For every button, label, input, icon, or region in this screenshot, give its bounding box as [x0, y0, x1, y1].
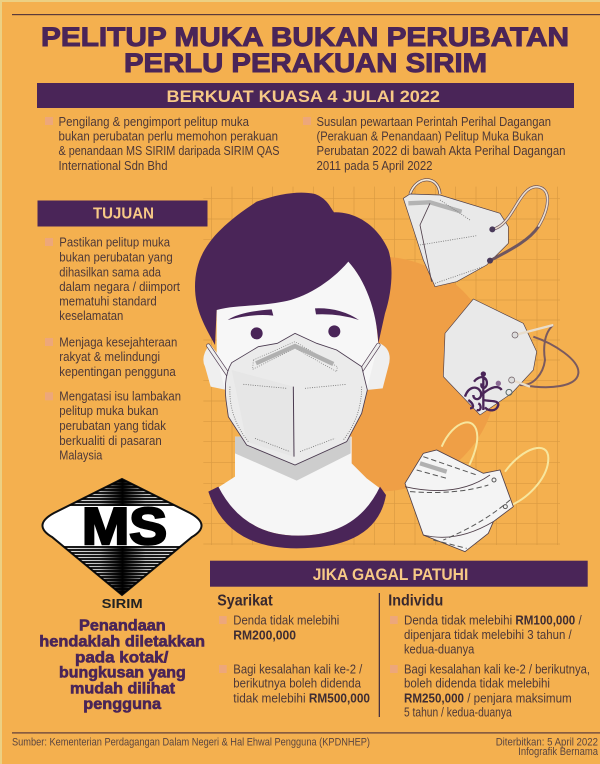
text block: purposes: perubatan yang tidak — [59, 418, 166, 433]
panel: individu penalties — [388, 593, 590, 720]
panel: individu penalties: Denda tidak melebihi RM100,000 / — [404, 612, 582, 627]
text block: purposes: Pastikan pelitup muka — [59, 235, 171, 250]
mask 2: floral mask — [443, 299, 578, 415]
banner: effective date: BERKUAT KUASA 4 JULAI 2022 — [166, 87, 440, 106]
panel: syarikat penalties: Bagi kesalahan kali ke-2 / — [233, 661, 363, 676]
text block: purposes: dalam negara / diimport — [59, 279, 180, 294]
text block: purposes: dihasilkan sama ada — [59, 265, 162, 280]
text block: purposes: bukan perubatan yang — [59, 250, 173, 265]
text block: gazette: 2011 pada 5 April 2022 — [316, 158, 432, 173]
text block: purposes: kepentingan pengguna — [59, 364, 176, 379]
panel: syarikat penalties — [217, 593, 370, 705]
logo: MS SIRIM: MS — [82, 498, 167, 556]
panel: syarikat penalties: berikutnya boleh didenda — [233, 676, 362, 691]
panel: individu penalties: 5 tahun / kedua-duanya — [404, 705, 512, 720]
panel: syarikat penalties: Denda tidak melebihi — [233, 612, 339, 627]
text block: purposes: rakyat & melindungi — [59, 349, 160, 364]
footer: publication credit — [496, 737, 599, 758]
panel: individu penalties: Individu — [388, 593, 443, 610]
orange circle backdrop — [263, 257, 497, 491]
heading: tujuan — [38, 200, 208, 226]
panel: individu penalties: kedua-duanya — [404, 641, 475, 656]
panel: individu penalties: dipenjara tidak melebihi 3 tahun / — [404, 627, 572, 642]
text block: purposes: Malaysia — [59, 447, 103, 462]
text block: purposes: mematuhi standard — [59, 294, 157, 309]
text block: labelling note: pengguna — [83, 696, 161, 713]
title: PERLU PERAKUAN SIRIM — [124, 48, 487, 78]
text block: labelling note — [39, 618, 205, 713]
text block: applicants: Pengilang & pengimport pelitup muka — [58, 114, 250, 129]
text block: applicants — [45, 114, 280, 173]
banner: effective date — [37, 83, 574, 108]
text block: purposes — [45, 235, 181, 462]
text block: applicants: & penandaan MS SIRIM daripada SIRIM QAS — [58, 143, 280, 158]
text block: purposes: Mengatasi isu lambakan — [59, 389, 181, 404]
text block: purposes: pelitup muka bukan — [59, 403, 158, 418]
title — [41, 22, 569, 78]
panel: individu penalties: RM250,000 / penjara maksimum — [404, 690, 572, 705]
panel: individu penalties: boleh didenda tidak melebihi — [404, 676, 550, 691]
text block: labelling note: bungkusan yang — [59, 664, 186, 682]
title: PELITUP MUKA BUKAN PERUBATAN — [41, 22, 569, 52]
text block: purposes: Menjaga kesejahteraan — [59, 335, 177, 350]
text block: applicants: bukan perubatan perlu memohon perakuan — [58, 128, 278, 144]
text block: purposes: berkualiti di pasaran — [59, 433, 162, 448]
logo: MS SIRIM: SIRIM — [102, 597, 143, 611]
text block: labelling note: pada kotak/ — [75, 649, 169, 666]
panel: syarikat penalties: RM200,000 — [233, 627, 296, 642]
mask 3: fish-shaped mask — [405, 422, 548, 552]
text block: purposes: keselamatan — [59, 308, 123, 323]
text block: gazette: (Perakuan & Penandaan) Pelitup Muka Bukan — [316, 128, 544, 144]
footer: source: Sumber: Kementerian Perdagangan Dalam Negeri & Hal Ehwal Pengguna (KPDNHEP) — [12, 737, 370, 749]
heading: tujuan: TUJUAN — [93, 206, 154, 222]
text block: labelling note: hendaklah diletakkan — [39, 634, 205, 651]
panel: syarikat penalties: Syarikat — [217, 593, 273, 610]
text block: labelling note: Penandaan — [79, 618, 166, 635]
text block: gazette — [303, 114, 566, 173]
text block: gazette: Susulan pewartaan Perintah Perihal Dagangan — [316, 114, 551, 129]
banner: penalties — [210, 561, 588, 587]
illustration: face and masks — [195, 180, 578, 552]
text block: labelling note: mudah dilihat — [70, 680, 175, 697]
person — [195, 193, 392, 548]
panel: syarikat penalties: tidak melebihi RM500,000 — [233, 690, 370, 705]
banner: penalties: JIKA GAGAL PATUHI — [313, 566, 468, 584]
mask 1: side view — [403, 180, 548, 287]
text block: gazette: Perubatan 2022 di bawah Akta Perihal Dagangan — [316, 143, 566, 158]
logo: MS SIRIM — [40, 479, 205, 611]
text block: applicants: International Sdn Bhd — [58, 158, 168, 173]
